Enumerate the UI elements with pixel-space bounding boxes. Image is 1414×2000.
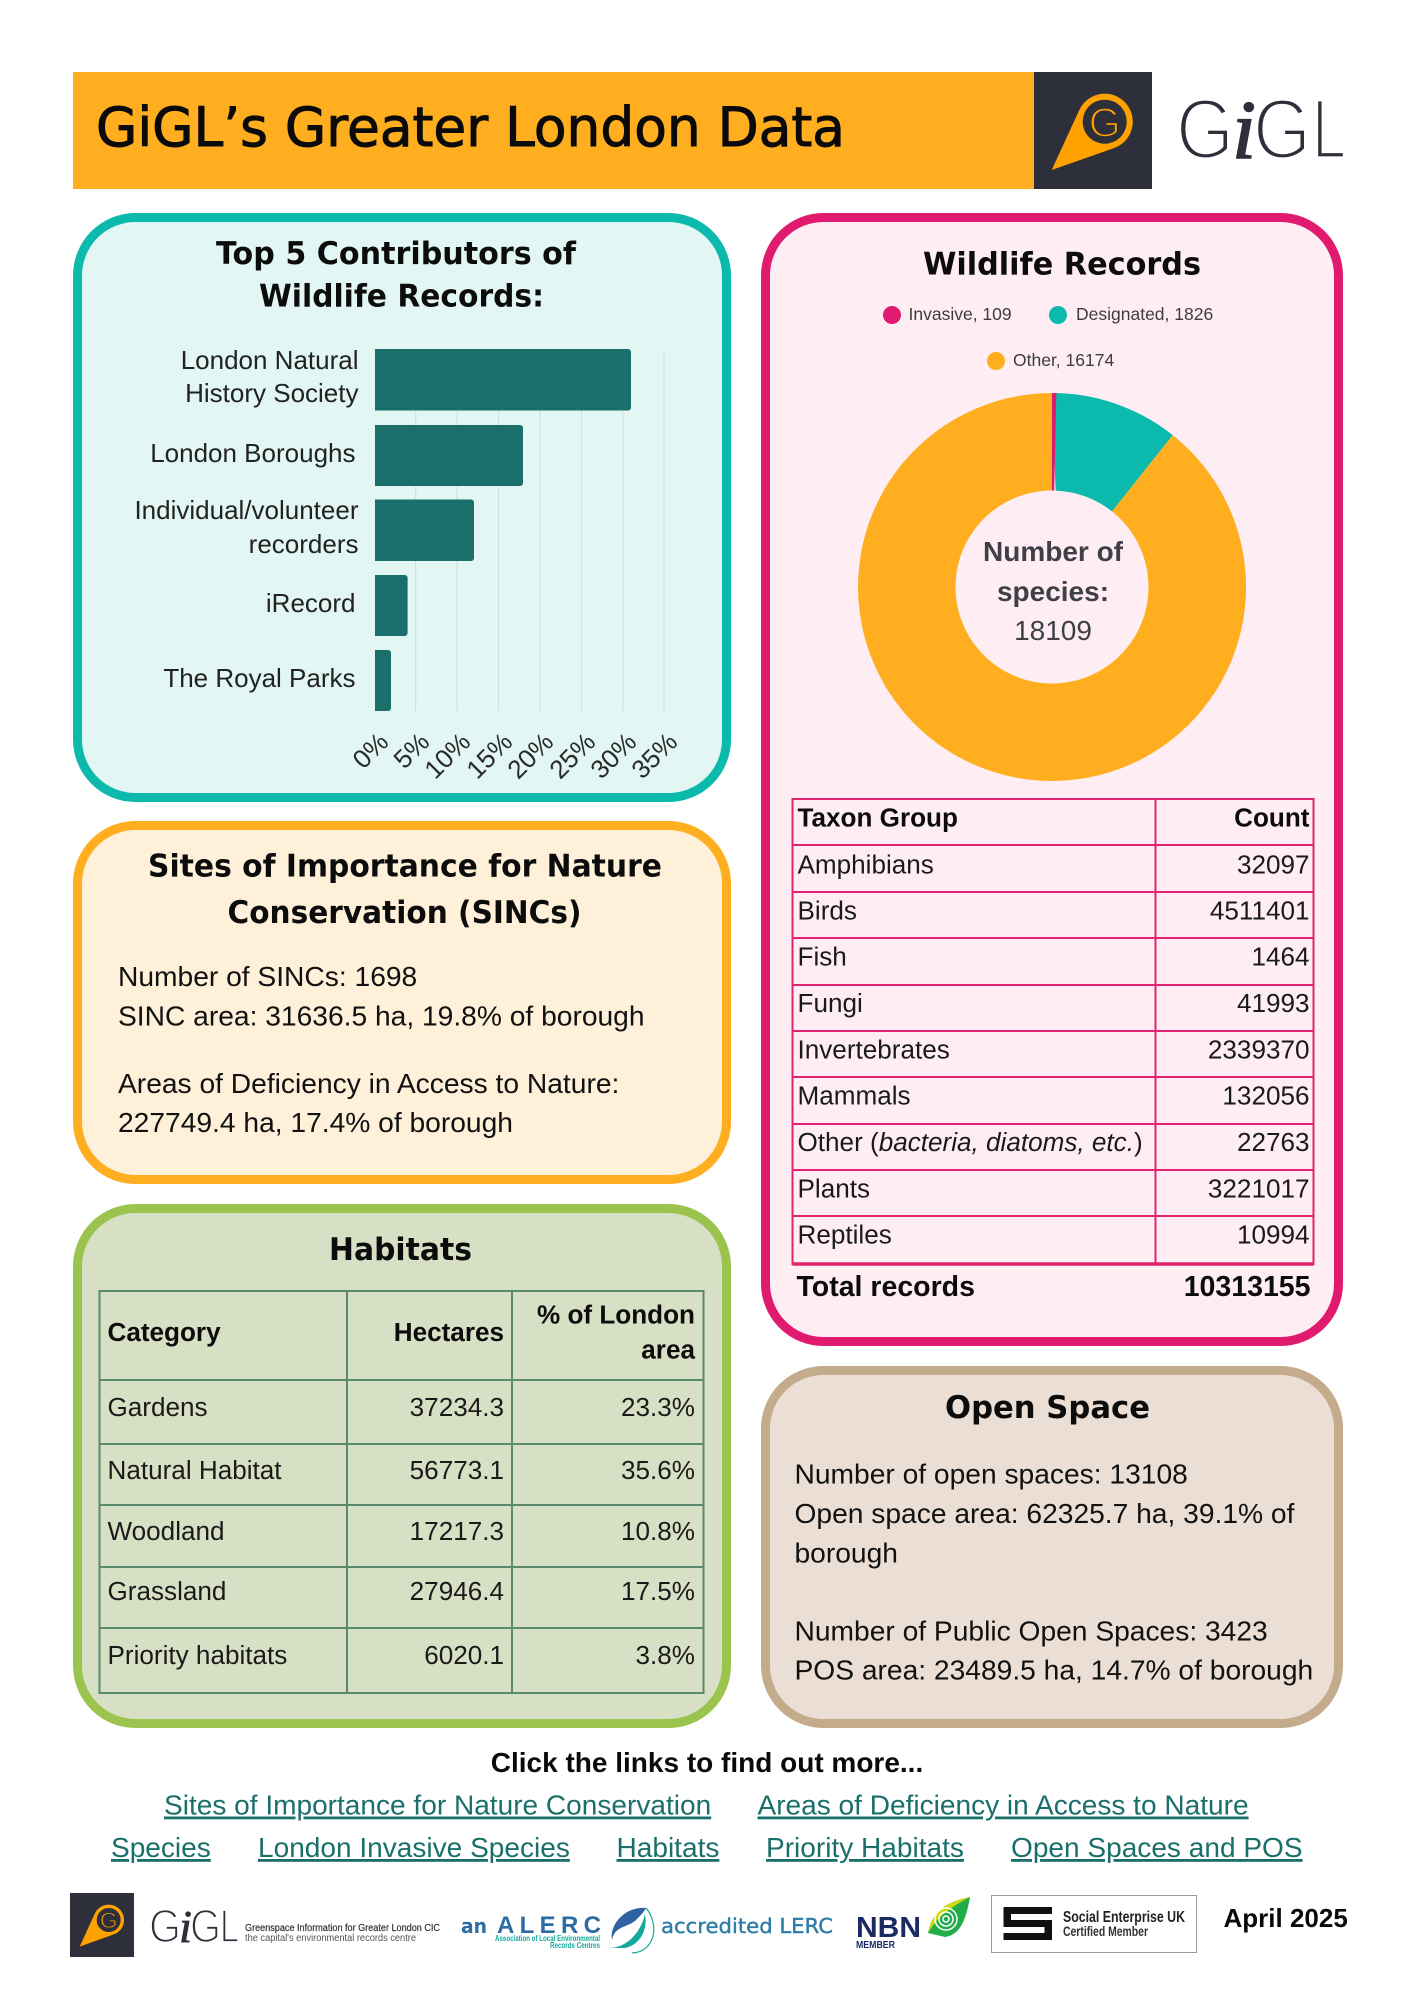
chart legend: Invasive, 109 [908, 304, 1012, 324]
table: taxon groups: Other (bacteria, diatoms, etc.) [798, 1127, 1143, 1157]
footer logo: ALERC: accredited LERC [661, 1914, 833, 1938]
table: habitats: 10.8% [621, 1516, 695, 1546]
table: habitats: Gardens [108, 1392, 208, 1422]
footer logo: Social Enterprise UK: Social Enterprise UK [1063, 1909, 1186, 1926]
donut centre label: Number of [983, 536, 1124, 567]
table: taxon groups: Amphibians [798, 850, 934, 880]
footer logo: NBN member [856, 1897, 970, 1951]
panel: habitats [78, 1208, 726, 1724]
links section [111, 1747, 1303, 1863]
table: taxon groups: 3221017 [1208, 1174, 1310, 1204]
donut centre label: species: [997, 576, 1109, 607]
date: April 2025 [1224, 1903, 1348, 1933]
table: habitats: 6020.1 [424, 1640, 504, 1670]
table: habitats: 17217.3 [410, 1516, 504, 1546]
table: taxon groups: Birds [798, 896, 857, 926]
text: SINC statistics [118, 960, 645, 1138]
icon: GiGL pin logo [1034, 72, 1152, 189]
table: taxon groups: 22763 [1237, 1127, 1310, 1157]
bar chart: contributors [134, 345, 683, 785]
table: habitats [100, 1291, 704, 1693]
table: taxon groups: 10313155 [1184, 1271, 1311, 1303]
table: taxon groups [792, 799, 1314, 1303]
links section: Habitats [616, 1832, 719, 1863]
heading: habitats: Habitats [329, 1232, 472, 1268]
text: open space statistics: Number of open spaces: 13108 [794, 1458, 1188, 1490]
bar chart: contributors: 20% [501, 727, 559, 785]
table: taxon groups: Reptiles [798, 1220, 892, 1250]
footer logo: ALERC: an [461, 1914, 487, 1938]
footer logo: GiGL [70, 1893, 440, 1957]
heading: top 5 contributors: Wildlife Records: [259, 278, 544, 314]
table: habitats: area [641, 1334, 695, 1364]
table: habitats: 27946.4 [410, 1576, 504, 1606]
heading: wildlife records: Wildlife Records [923, 246, 1201, 282]
links section: Click the links to find out more... [491, 1747, 923, 1778]
logo wordmark: GiGL: G [1253, 82, 1311, 176]
links section: Areas of Deficiency in Access to Nature [758, 1790, 1249, 1820]
footer logo: GiGL: Greenspace Information for Greater London CIC [245, 1923, 440, 1934]
text: SINC statistics: Areas of Deficiency in Access to Nature: [118, 1067, 619, 1099]
panel: top 5 contributors [78, 218, 726, 798]
table: taxon groups: Mammals [798, 1080, 911, 1110]
table: taxon groups: Plants [798, 1174, 870, 1204]
heading: SINCs [148, 848, 662, 931]
text: SINC statistics: SINC area: 31636.5 ha, 19.8% of borough [118, 1000, 645, 1032]
footer logo: GiGL: the capital's environmental records centre [245, 1933, 416, 1944]
text: open space statistics: Number of Public Open Spaces: 3423 [794, 1614, 1268, 1646]
donut chart: number of species [858, 393, 1246, 781]
table: habitats: Priority habitats [108, 1640, 287, 1670]
footer logo: NBN member: MEMBER [856, 1940, 896, 1951]
logo wordmark: GiGL [1176, 82, 1346, 177]
chart legend: Designated, 1826 [1076, 304, 1213, 324]
table: habitats: Grassland [108, 1576, 226, 1606]
table: taxon groups: Invertebrates [798, 1034, 950, 1064]
footer logo: GiGL: G [190, 1900, 221, 1952]
table: taxon groups: 2339370 [1208, 1034, 1310, 1064]
table: taxon groups: 10994 [1237, 1220, 1310, 1250]
table: taxon groups: 4511401 [1210, 896, 1310, 926]
logo wordmark: GiGL: G [1176, 82, 1234, 176]
heading: SINCs: Conservation (SINCs) [228, 895, 582, 931]
footer logo: GiGL: G [149, 1900, 181, 1952]
text: open space statistics: borough [794, 1536, 898, 1568]
links section: Sites of Importance for Nature Conservation [164, 1790, 711, 1820]
footer logo: ALERC: Records Centres [550, 1941, 600, 1950]
bar chart: contributors: Individual/volunteer [134, 495, 359, 525]
bar chart: contributors: 25% [543, 727, 601, 785]
text: SINC statistics: Number of SINCs: 1698 [118, 960, 417, 992]
links section: Open Spaces and POS [1011, 1832, 1303, 1863]
footer logo: ALERC [461, 1908, 833, 1953]
footer logo: GiGL: i [179, 1901, 192, 1952]
footer logo: Social Enterprise UK: Certified Member [1063, 1924, 1149, 1939]
header banner [73, 72, 1034, 189]
links section: London Invasive Species [258, 1832, 570, 1863]
table: habitats: 3.8% [636, 1640, 695, 1670]
table: habitats: 37234.3 [410, 1392, 504, 1422]
bar chart: contributors: 15% [460, 727, 518, 785]
table: habitats: % of London [537, 1300, 695, 1330]
icon: GiGL pin logo: G [1089, 100, 1121, 146]
footer logo: Social Enterprise UK [992, 1896, 1196, 1952]
title: GiGL’s Greater London Data [96, 96, 845, 159]
text: SINC statistics: 227749.4 ha, 17.4% of borough [118, 1106, 513, 1138]
heading: open space: Open Space [945, 1390, 1150, 1426]
bar chart: contributors: History Society [185, 378, 358, 408]
bar chart: contributors: iRecord [266, 588, 356, 618]
panel: wildlife records [766, 218, 1338, 1342]
chart legend [883, 304, 1213, 370]
table: habitats: Category [108, 1317, 221, 1347]
bar chart: contributors: 35% [625, 727, 683, 785]
panel: open space [766, 1370, 1338, 1724]
footer logo: NBN member: NBN [856, 1912, 921, 1944]
heading: SINCs: Sites of Importance for Nature [148, 848, 662, 884]
footer logo: GiGL: L [220, 1900, 239, 1952]
table: taxon groups: Total records [796, 1271, 975, 1303]
table: habitats: 56773.1 [410, 1455, 504, 1485]
chart legend: Other, 16174 [1013, 350, 1114, 370]
bar chart: contributors: 10% [418, 727, 476, 785]
footer logo: ALERC: Association of Local Environmental [495, 1934, 600, 1943]
bar chart: contributors: 0% [346, 727, 394, 774]
footer logo: ALERC: ALERC [497, 1912, 601, 1939]
text: open space statistics [794, 1458, 1313, 1686]
table: taxon groups: 132056 [1222, 1080, 1310, 1110]
bar chart: contributors: 5% [387, 727, 435, 774]
table: habitats: 17.5% [621, 1576, 695, 1606]
table: habitats: Hectares [394, 1317, 504, 1347]
table: taxon groups: 41993 [1237, 988, 1310, 1018]
bar chart: contributors: London Natural [181, 345, 358, 375]
bar chart: contributors: London Boroughs [150, 438, 356, 468]
table: habitats: Woodland [108, 1516, 225, 1546]
bar chart: contributors: 30% [584, 727, 642, 785]
donut centre label [983, 536, 1124, 646]
table: taxon groups: 32097 [1237, 850, 1310, 880]
logo wordmark: GiGL: L [1312, 82, 1346, 176]
table: taxon groups: Count [1234, 802, 1310, 832]
heading: top 5 contributors: Top 5 Contributors of [216, 236, 576, 272]
table: taxon groups: 1464 [1251, 942, 1310, 972]
table: taxon groups: Fish [798, 942, 847, 972]
table: taxon groups: Fungi [798, 988, 863, 1018]
table: habitats: 23.3% [621, 1392, 695, 1422]
panel: SINCs [78, 826, 726, 1180]
logo wordmark: GiGL: i [1232, 84, 1256, 177]
bar chart: contributors: recorders [249, 529, 358, 559]
text: open space statistics: POS area: 23489.5 ha, 14.7% of borough [794, 1654, 1313, 1686]
footer logo: GiGL: G [100, 1908, 117, 1933]
table: taxon groups: Taxon Group [798, 802, 958, 832]
table: habitats: Natural Habitat [108, 1455, 282, 1485]
links section: Priority Habitats [766, 1832, 964, 1863]
text: open space statistics: Open space area: 62325.7 ha, 39.1% of [794, 1497, 1295, 1529]
heading: top 5 contributors [216, 236, 576, 314]
links section: Species [111, 1832, 211, 1863]
bar chart: contributors: The Royal Parks [163, 663, 356, 693]
table: habitats: 35.6% [621, 1455, 695, 1485]
donut centre label: 18109 [1014, 615, 1092, 646]
